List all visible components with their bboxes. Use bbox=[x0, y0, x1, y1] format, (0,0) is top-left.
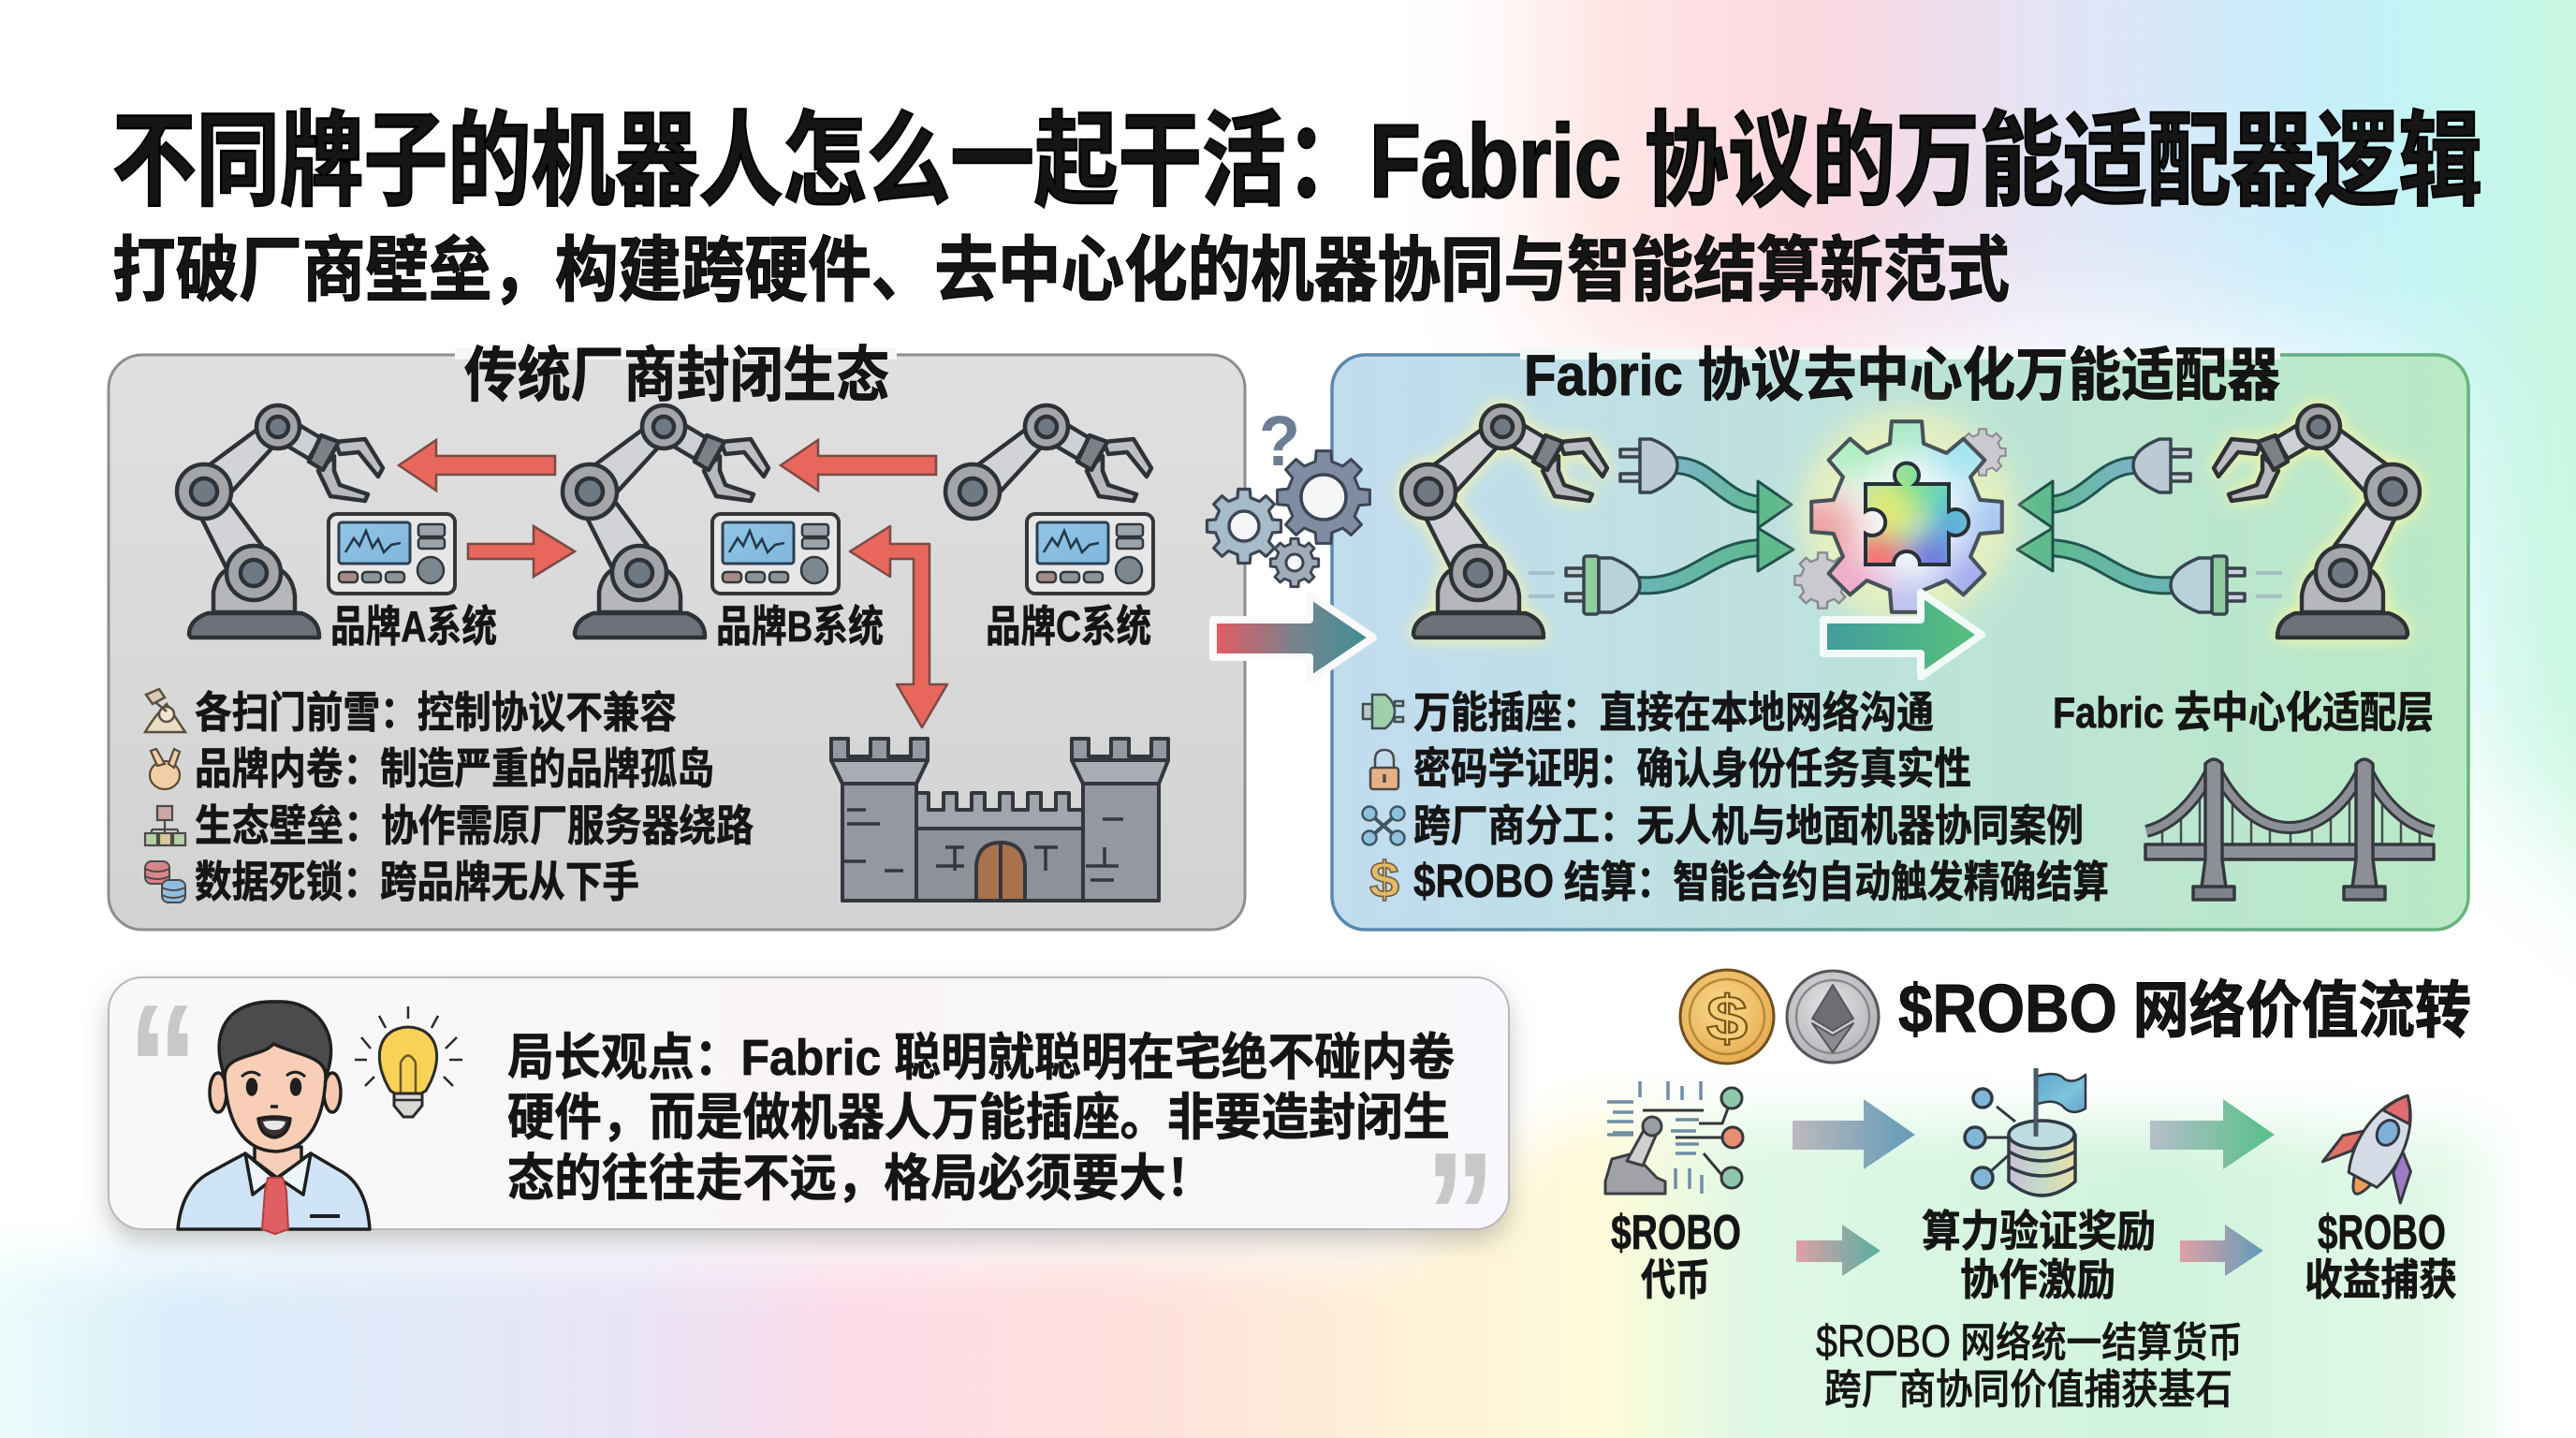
icon: tangled gears bbox=[1207, 451, 1369, 587]
icon: robot with data circuits bbox=[1605, 1081, 1743, 1194]
icon: gold dollar coin bbox=[1680, 970, 1774, 1064]
label: brand A system: 品牌A系统 bbox=[330, 602, 497, 651]
label: compute rewards: 协作激励 bbox=[1960, 1255, 2115, 1304]
arrow: A to B bbox=[468, 526, 575, 577]
icon: castle bbox=[831, 739, 1168, 901]
panel: traditional closed ecosystem bbox=[109, 342, 1245, 930]
icon: cross-vendor network bbox=[1363, 807, 1404, 844]
icon: rainbow gear with puzzle piece bbox=[1785, 389, 2032, 645]
arrow: rewards to capture bbox=[2150, 1099, 2275, 1169]
list: Fabric features bbox=[1363, 688, 2109, 908]
icon: gold dollar coin: $ bbox=[1706, 983, 1748, 1054]
arrow: C to B bbox=[781, 440, 936, 491]
arrow: castle to B bbox=[850, 526, 947, 727]
icon: universal plug bbox=[1363, 695, 1403, 728]
icon: database with flag bbox=[1965, 1068, 2086, 1196]
connectors: left plugs and arrows bbox=[1529, 439, 1793, 614]
arrow: small incentives to capture bbox=[2180, 1225, 2263, 1276]
icon: presenter portrait bbox=[178, 1002, 370, 1234]
text: row 1: 万能插座：直接在本地网络沟通 bbox=[1413, 688, 1934, 737]
robot arm: left glowing bbox=[1401, 405, 1607, 638]
text: commentary bbox=[507, 1030, 1455, 1207]
robot arm: brand C bbox=[945, 405, 1151, 519]
text: row 2: 品牌内卷：制造严重的品牌孤岛 bbox=[195, 744, 714, 793]
caption: unified settlement: 跨厂商协同价值捕获基石 bbox=[1824, 1367, 2232, 1413]
label: $ROBO revenue capture: 收益捕获 bbox=[2305, 1255, 2457, 1304]
text: commentary: 局长观点：Fabric 聪明就聪明在宅绝不碰内卷 bbox=[507, 1030, 1455, 1086]
icon: padlock bbox=[1370, 750, 1398, 789]
text: row 4: 数据死锁：跨品牌无从下手 bbox=[195, 858, 639, 906]
control panel: brand C bbox=[1027, 514, 1153, 594]
label: brand C system: 品牌C系统 bbox=[986, 602, 1151, 651]
subtitle: 打破厂商壁垒，构建跨硬件、去中心化的机器协同与智能结算新范式 bbox=[112, 231, 2010, 311]
arrow: B to A bbox=[399, 440, 555, 491]
icon: org chart bbox=[145, 806, 185, 845]
heading: $ROBO value flow: $ROBO 网络价值流转 bbox=[1898, 972, 2471, 1047]
arrow: token to rewards bbox=[1793, 1099, 1915, 1169]
connectors: right plugs and arrows bbox=[2017, 439, 2282, 614]
icon: databases bbox=[145, 861, 185, 902]
heading: traditional closed ecosystem: 传统厂商封闭生态 bbox=[464, 342, 889, 409]
panel: Fabric decentralized universal adapter bbox=[1332, 344, 2468, 930]
label: $ROBO revenue capture: $ROBO bbox=[2318, 1206, 2446, 1260]
icon: rocket bbox=[2317, 1075, 2447, 1214]
list: closed-ecosystem pain points bbox=[145, 688, 754, 906]
icon: robot sketch bbox=[145, 689, 185, 732]
caption: unified settlement bbox=[1816, 1317, 2243, 1413]
robot arm: right glowing bbox=[2214, 405, 2420, 638]
control panel: brand A bbox=[329, 514, 455, 594]
label: $ROBO token bbox=[1611, 1206, 1741, 1304]
label: brand B system: 品牌B系统 bbox=[716, 602, 884, 651]
arrow: transition from closed to open bbox=[1213, 594, 1373, 681]
quote mark: opening: “ bbox=[127, 968, 198, 1167]
text: commentary: 态的往往走不远，格局必须要大！ bbox=[507, 1151, 1213, 1207]
text: row 2: 密码学证明：确认身份任务真实性 bbox=[1413, 744, 1971, 793]
label: $ROBO revenue capture bbox=[2305, 1206, 2457, 1304]
text: row 3: 生态壁垒：协作需原厂服务器绕路 bbox=[195, 801, 754, 850]
arrow: green adapter arrow bbox=[1823, 593, 1982, 677]
label: $ROBO token: 代币 bbox=[1641, 1255, 1710, 1304]
section: $ROBO value flow bbox=[1605, 970, 2471, 1413]
arrow: small token to incentives bbox=[1796, 1225, 1881, 1276]
icon: question mark: ? bbox=[1259, 402, 1300, 481]
text: row 4: $ROBO 结算：智能合约自动触发精确结算 bbox=[1413, 855, 2109, 907]
text: row 1: 各扫门前雪：控制协议不兼容 bbox=[195, 688, 677, 737]
control panel: brand B bbox=[712, 514, 839, 594]
robot arm: brand B bbox=[563, 405, 768, 638]
icon: dollar sign: $ bbox=[1369, 852, 1399, 908]
label: compute rewards bbox=[1922, 1207, 2156, 1304]
label: compute rewards: 算力验证奖励 bbox=[1922, 1207, 2156, 1255]
label: $ROBO token: $ROBO bbox=[1611, 1206, 1741, 1260]
icon: silver ethereum coin bbox=[1787, 971, 1879, 1063]
icon: suspension bridge bbox=[2145, 759, 2434, 900]
icon: light bulb bbox=[355, 1006, 462, 1117]
caption: unified settlement: $ROBO 网络统一结算货币 bbox=[1816, 1317, 2243, 1367]
text: commentary: 硬件，而是做机器人万能插座。非要造封闭生 bbox=[507, 1090, 1450, 1146]
quote mark: closing: ” bbox=[1425, 1116, 1496, 1314]
text: row 3: 跨厂商分工：无人机与地面机器协同案例 bbox=[1413, 801, 2084, 850]
label: Fabric adapter layer: Fabric 去中心化适配层 bbox=[2053, 688, 2434, 737]
icon: crossed fingers bbox=[150, 749, 180, 789]
robot arm: brand A bbox=[177, 405, 383, 638]
heading: Fabric adapter: Fabric 协议去中心化万能适配器 bbox=[1524, 344, 2280, 408]
panel: commentary quote card bbox=[109, 968, 1509, 1314]
